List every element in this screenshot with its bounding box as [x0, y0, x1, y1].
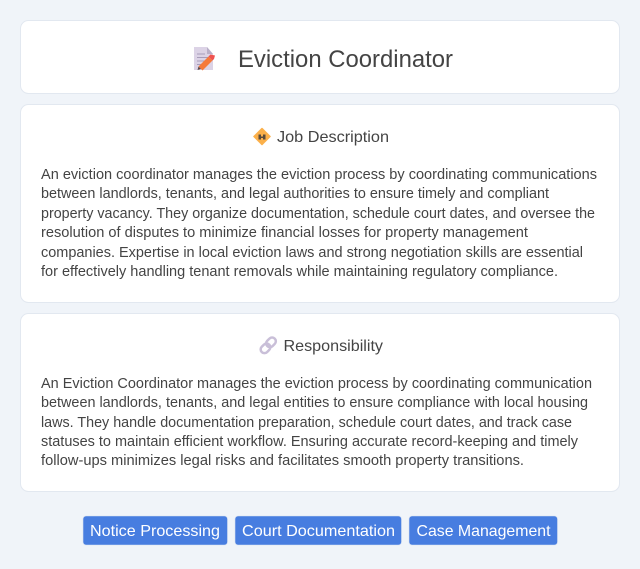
text block: responsibility [41, 376, 592, 469]
text block: responsibility: statuses to maintain efficient workflow. Ensuring accurate record-keeping and timely [41, 434, 579, 450]
tag: notice processing [83, 516, 228, 545]
text block: job description: companies. Expertise in local eviction laws and strong negotiation skills are essential [41, 245, 583, 261]
heading: job description: Job Description [277, 129, 389, 146]
text block: responsibility: An Eviction Coordinator manages the eviction process by coordinating communication [41, 376, 592, 392]
icon: orange diamond sign [254, 128, 270, 144]
heading: responsibility: Responsibility [284, 338, 383, 355]
tag: case management: Case Management [416, 523, 551, 540]
tag: court documentation: Court Documentation [242, 523, 395, 540]
text block: responsibility: between landlords, tenants, and legal entities to ensure compliance with local housing [41, 395, 588, 411]
text block: job description: between landlords, tenants, and legal authorities to ensure timely and compliant [41, 186, 549, 202]
title: Eviction Coordinator [238, 46, 453, 73]
text block: job description: property vacancy. They organize documentation, schedule court dates, and oversee the [41, 206, 595, 222]
text block: responsibility: laws. They handle documentation preparation, schedule court dates, and track case [41, 415, 572, 431]
text block: responsibility: follow-ups minimizes legal risks and facilitates smooth property transitions. [41, 453, 524, 469]
panel: responsibility [20, 314, 620, 492]
tag: notice processing: Notice Processing [90, 523, 220, 540]
text block: job description: An eviction coordinator manages the eviction process by coordinating communications [41, 167, 597, 183]
tag: court documentation [235, 516, 402, 545]
icon: document with pencil [194, 47, 215, 70]
text block: job description [41, 167, 597, 280]
tag: case management [409, 516, 558, 545]
panel: job description [20, 104, 620, 302]
text block: job description: resolution of disputes to minimize financial losses for property management [41, 225, 528, 241]
panel: title card [20, 20, 620, 94]
text block: job description: for effectively handling tenant removals while maintaining regulatory compliance. [41, 264, 558, 280]
icon: chain link [259, 336, 277, 355]
